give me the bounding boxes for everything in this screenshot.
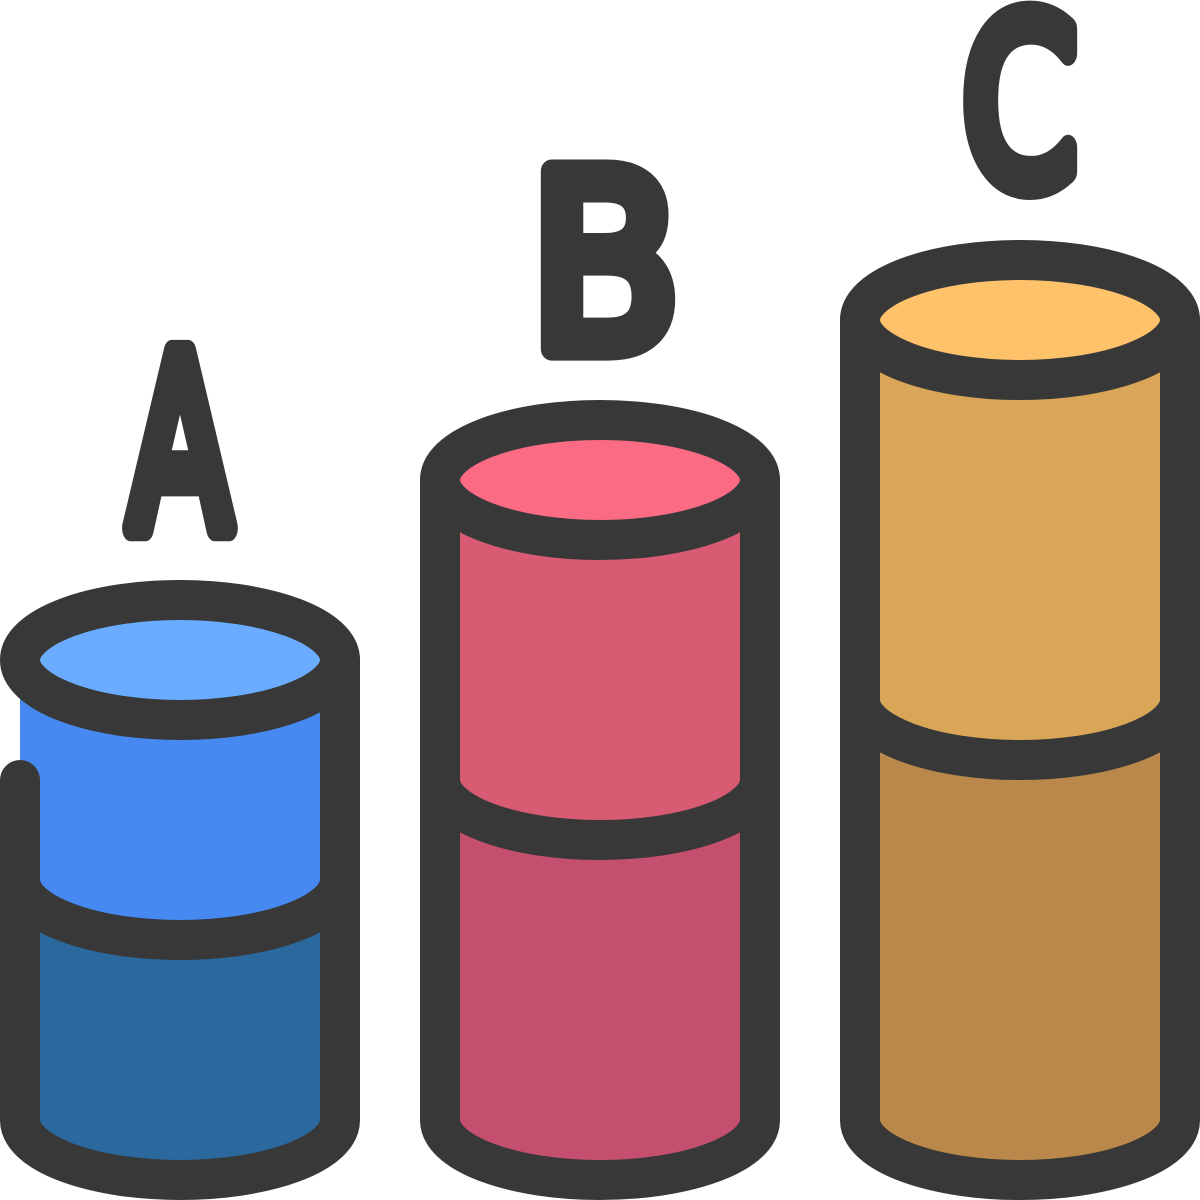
bar C: amber cylinder <box>860 260 1180 1180</box>
segment: B lower dark red <box>440 780 760 1180</box>
top face: C light amber <box>860 260 1180 380</box>
outline: C top rim <box>860 260 1180 380</box>
outline: C cylinder <box>860 320 1180 1180</box>
outline: A cylinder <box>20 660 340 1180</box>
outline: A top rim <box>20 600 340 720</box>
segment: C upper tan <box>860 320 1180 760</box>
segment: C lower brown <box>860 700 1180 1180</box>
outline: B cylinder <box>440 480 760 1180</box>
label: B: B <box>530 123 680 407</box>
top face: A light blue <box>20 600 340 720</box>
outline: B top rim <box>440 420 760 540</box>
bar B: red cylinder <box>440 420 760 1180</box>
segment: A upper blue <box>20 660 340 940</box>
segment: A lower dark blue <box>20 880 340 1180</box>
top face: B light red <box>440 420 760 540</box>
bar A: blue cylinder <box>20 600 340 1180</box>
label: A: A <box>129 307 231 586</box>
segment: B upper red <box>440 480 760 840</box>
